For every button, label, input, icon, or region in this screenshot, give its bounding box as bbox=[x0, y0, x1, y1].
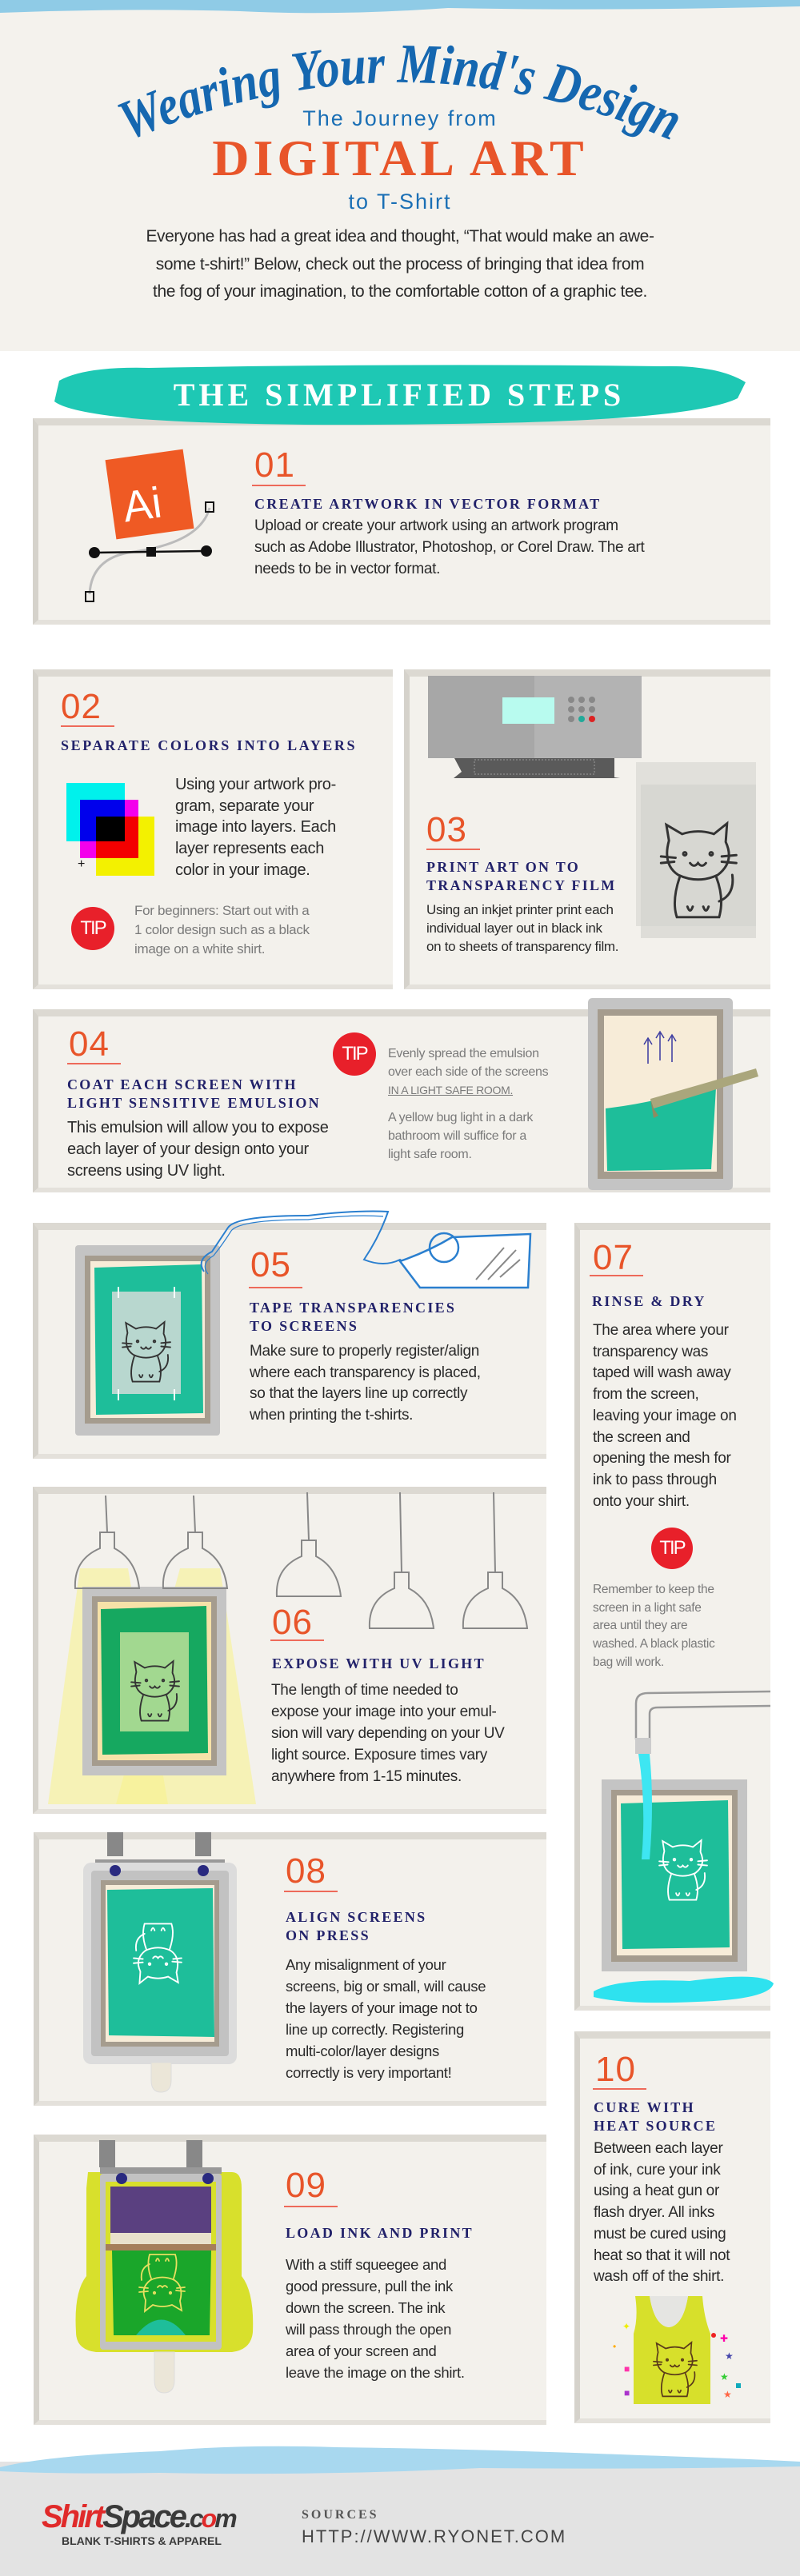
panel 9 bbox=[34, 2135, 546, 2425]
tip 04: bathroom will suffice for a bbox=[388, 1129, 526, 1143]
step 06 text bbox=[270, 1603, 505, 1785]
panel 2 bbox=[33, 669, 393, 989]
icon: cured t-shirt with sparkles: ★ bbox=[720, 2371, 729, 2382]
step 08 text: multi-color/layer designs bbox=[286, 2043, 439, 2059]
step 08 text: Any misalignment of your bbox=[286, 1956, 446, 1973]
icon: illustrator with bezier bbox=[85, 449, 214, 602]
step 02 text: 02 bbox=[61, 687, 102, 726]
tip 02: 1 color design such as a black bbox=[134, 922, 310, 937]
icon: cured t-shirt with sparkles bbox=[613, 2296, 741, 2404]
icon: cmyk layers bbox=[66, 783, 154, 876]
step 08 text: the layers of your image not to bbox=[286, 1999, 478, 2016]
step 05 text: where each transparency is placed, bbox=[250, 1364, 481, 1381]
step 03 text: individual layer out in black ink bbox=[426, 921, 602, 936]
step 10 text bbox=[593, 2050, 730, 2285]
step 04 text bbox=[67, 1024, 329, 1180]
step 02 text: layer represents each bbox=[175, 840, 324, 857]
panel 1 bbox=[33, 418, 770, 625]
step 09 text: area of your screen and bbox=[286, 2342, 437, 2359]
sources: SOURCES bbox=[302, 2508, 379, 2522]
step 02 text: color in your image. bbox=[175, 861, 310, 879]
step 05 text: TO SCREENS bbox=[250, 1318, 358, 1334]
step 07 text: taped will wash away bbox=[593, 1364, 730, 1381]
step 09 text: LOAD INK AND PRINT bbox=[286, 2225, 474, 2241]
step 01 text bbox=[252, 445, 645, 577]
tip 07: TIP bbox=[659, 1537, 685, 1559]
intro paragraph: some t-shirt!” Below, check out the process of bringing that idea from bbox=[156, 254, 644, 274]
step 08 text: 08 bbox=[286, 1851, 326, 1891]
step 04 text: COAT EACH SCREEN WITH bbox=[67, 1076, 298, 1092]
step 01 text: 01 bbox=[254, 445, 295, 485]
logo: shirtspace: BLANK T-SHIRTS & APPAREL bbox=[62, 2534, 222, 2547]
step 06 text: expose your image into your emul- bbox=[271, 1703, 497, 1720]
top blue brush stroke bbox=[0, 0, 800, 13]
step 02 text: image into layers. Each bbox=[175, 818, 336, 836]
icon: illustrator with bezier: Ai bbox=[120, 478, 165, 531]
step 08 text: ALIGN SCREENS bbox=[286, 1909, 426, 1925]
tip 07: area until they are bbox=[593, 1619, 687, 1632]
panel 7 bbox=[574, 1223, 770, 2011]
step 05 text: TAPE TRANSPARENCIES bbox=[250, 1300, 456, 1316]
step 04 text: screens using UV light. bbox=[67, 1162, 226, 1180]
step 01 text: CREATE ARTWORK IN VECTOR FORMAT bbox=[254, 496, 601, 512]
icon: cured t-shirt with sparkles: ★ bbox=[725, 2350, 734, 2362]
icon: press with ink bbox=[75, 2140, 253, 2393]
step 07 text: from the screen, bbox=[593, 1386, 698, 1403]
step 02 text: gram, separate your bbox=[175, 797, 314, 815]
footer blue brush bbox=[0, 2446, 800, 2474]
step 08 text: correctly is very important! bbox=[286, 2064, 451, 2081]
tip 04: over each side of the screens bbox=[388, 1065, 548, 1079]
banner: the simplified steps: THE SIMPLIFIED STEPS bbox=[174, 377, 625, 413]
panel 8 bbox=[34, 1832, 546, 2106]
subtitle: to t-shirt: to T-Shirt bbox=[348, 190, 452, 214]
step 05 text: when printing the t-shirts. bbox=[250, 1407, 413, 1424]
icon: screen on press bbox=[83, 1832, 237, 2092]
tip 07: bag will work. bbox=[593, 1655, 664, 1669]
step 01 text: Upload or create your artwork using an artwork program bbox=[254, 517, 618, 534]
tip 02: TIP bbox=[80, 917, 106, 939]
tip 07: washed. A black plastic bbox=[593, 1637, 715, 1651]
step 06 text: The length of time needed to bbox=[271, 1682, 458, 1699]
step 07 text: transparency was bbox=[593, 1344, 708, 1360]
icon: screen with taped transparency bbox=[75, 1245, 220, 1436]
step 07 text: 07 bbox=[593, 1238, 634, 1277]
tip 02: image on a white shirt. bbox=[134, 941, 265, 957]
sources: HTTP://WWW.RYONET.COM bbox=[302, 2526, 566, 2546]
step 08 text: screens, big or small, will cause bbox=[286, 1978, 486, 1995]
icon: uv lamps over screen bbox=[48, 1492, 528, 1804]
intro paragraph: the fog of your imagination, to the comfortable cotton of a graphic tee. bbox=[153, 282, 647, 301]
icon: faucet rinsing screen bbox=[594, 1691, 774, 2003]
step 04 text: 04 bbox=[69, 1024, 110, 1064]
step 05 text: so that the layers line up correctly bbox=[250, 1385, 467, 1402]
step 03 text: Using an inkjet printer print each bbox=[426, 902, 614, 917]
tip 02 bbox=[71, 903, 310, 957]
sources bbox=[302, 2508, 566, 2546]
step 07 text: the screen and bbox=[593, 1429, 690, 1446]
step 07 text: opening the mesh for bbox=[593, 1450, 731, 1467]
step 08 text: line up correctly. Registering bbox=[286, 2021, 464, 2038]
step 08 text bbox=[284, 1851, 486, 2081]
title: script arc: Wearing Your Mind's Design bbox=[118, 45, 678, 139]
panel 6 bbox=[33, 1487, 546, 1814]
step 07 text bbox=[590, 1238, 737, 1510]
icon: tape dispenser bbox=[200, 1211, 531, 1289]
icon: printer bbox=[428, 676, 642, 778]
icon: cured t-shirt with sparkles: ★ bbox=[723, 2389, 732, 2400]
step 10 text: heat so that it will not bbox=[594, 2247, 730, 2264]
step 07 text: ink to pass through bbox=[593, 1472, 717, 1488]
step 03 text: 03 bbox=[426, 810, 467, 849]
step 06 text: light source. Exposure times vary bbox=[271, 1747, 487, 1763]
step 06 text: EXPOSE WITH UV LIGHT bbox=[272, 1655, 486, 1671]
step 10 text: must be cured using bbox=[594, 2226, 726, 2243]
step 10 text: using a heat gun or bbox=[594, 2183, 719, 2199]
tip 07: Remember to keep the bbox=[593, 1583, 714, 1596]
icon: transparency film bbox=[636, 762, 756, 938]
step 10 text: CURE WITH bbox=[594, 2099, 695, 2115]
panel 4 bbox=[33, 1009, 770, 1192]
step 06 text: 06 bbox=[272, 1603, 313, 1642]
step 07 text: leaving your image on bbox=[593, 1408, 737, 1424]
header background bbox=[0, 0, 800, 351]
step 10 text: Between each layer bbox=[594, 2140, 722, 2157]
icon: cured t-shirt with sparkles: • bbox=[613, 2341, 616, 2352]
tip 04 bbox=[333, 1032, 548, 1161]
step 01 text: such as Adobe Illustrator, Photoshop, or Corel Draw. The art bbox=[254, 539, 645, 556]
footer background bbox=[0, 2462, 800, 2576]
step 05 text: Make sure to properly register/align bbox=[250, 1343, 479, 1360]
intro paragraph: Everyone has had a great idea and thought, “That would make an awe- bbox=[146, 227, 654, 246]
step 03 text bbox=[426, 810, 618, 954]
panel 3 bbox=[404, 669, 770, 989]
step 03 text: PRINT ART ON TO bbox=[426, 859, 580, 875]
step 03 text: on to sheets of transparency film. bbox=[426, 939, 618, 954]
icon: cured t-shirt with sparkles: ■ bbox=[624, 2387, 630, 2398]
step 02 text bbox=[61, 687, 357, 879]
step 09 text: down the screen. The ink bbox=[286, 2299, 445, 2316]
step 04 text: LIGHT SENSITIVE EMULSION bbox=[67, 1095, 321, 1111]
tip 07 bbox=[593, 1528, 715, 1669]
step 10 text: of ink, cure your ink bbox=[594, 2162, 720, 2179]
step 04 text: This emulsion will allow you to expose bbox=[67, 1119, 329, 1136]
step 06 text: sion will vary depending on your UV bbox=[271, 1725, 505, 1742]
step 02 text: Using your artwork pro- bbox=[175, 776, 336, 793]
icon: cured t-shirt with sparkles: ✚ bbox=[720, 2333, 728, 2344]
step 06 text: anywhere from 1-15 minutes. bbox=[271, 1768, 462, 1785]
step 03 text: TRANSPARENCY FILM bbox=[426, 877, 617, 893]
tip 02: For beginners: Start out with a bbox=[134, 903, 309, 918]
tip 04: IN A LIGHT SAFE ROOM. bbox=[388, 1084, 513, 1096]
icon: screen with squeegee bbox=[588, 998, 758, 1190]
step 04 text: each layer of your design onto your bbox=[67, 1140, 309, 1158]
panel 10 bbox=[574, 2031, 770, 2423]
step 10 text: wash off of the shirt. bbox=[594, 2268, 724, 2285]
step 07 text: RINSE & DRY bbox=[592, 1293, 706, 1309]
icon: cmyk layers: + bbox=[78, 857, 85, 871]
step 01 text: needs to be in vector format. bbox=[254, 561, 440, 577]
tip 07: screen in a light safe bbox=[593, 1601, 702, 1615]
step 10 text: flash dryer. All inks bbox=[594, 2204, 714, 2221]
step 09 text: good pressure, pull the ink bbox=[286, 2278, 453, 2294]
step 08 text: ON PRESS bbox=[286, 1927, 370, 1943]
icon: cured t-shirt with sparkles: ■ bbox=[624, 2363, 630, 2374]
step 10 text: HEAT SOURCE bbox=[594, 2118, 717, 2134]
step 05 text bbox=[249, 1245, 481, 1424]
tip 04: TIP bbox=[342, 1043, 367, 1064]
subtitle: the journey from: The Journey from bbox=[302, 106, 498, 130]
step 02 text: SEPARATE COLORS INTO LAYERS bbox=[61, 737, 357, 753]
step 07 text: onto your shirt. bbox=[593, 1493, 690, 1510]
step 07 text: The area where your bbox=[593, 1322, 729, 1339]
logo: shirtspace: ShirtSpace.com bbox=[42, 2499, 235, 2534]
tip 04: Evenly spread the emulsion bbox=[388, 1047, 539, 1060]
step 10 text: 10 bbox=[595, 2050, 636, 2089]
step 09 text: 09 bbox=[286, 2166, 326, 2205]
tip 04: light safe room. bbox=[388, 1148, 472, 1161]
step 09 text: With a stiff squeegee and bbox=[286, 2256, 446, 2273]
step 09 text: will pass through the open bbox=[286, 2321, 451, 2338]
step 05 text: 05 bbox=[250, 1245, 291, 1284]
panel 5 bbox=[33, 1223, 546, 1459]
step 09 text: leave the image on the shirt. bbox=[286, 2364, 465, 2381]
step 09 text bbox=[284, 2166, 474, 2381]
icon: cured t-shirt with sparkles: ✦ bbox=[622, 2321, 630, 2332]
title: digital art: DIGITAL ART bbox=[212, 130, 588, 186]
tip 04: A yellow bug light in a dark bbox=[388, 1111, 533, 1124]
banner: the simplified steps bbox=[54, 365, 746, 425]
intro paragraph bbox=[146, 227, 654, 301]
